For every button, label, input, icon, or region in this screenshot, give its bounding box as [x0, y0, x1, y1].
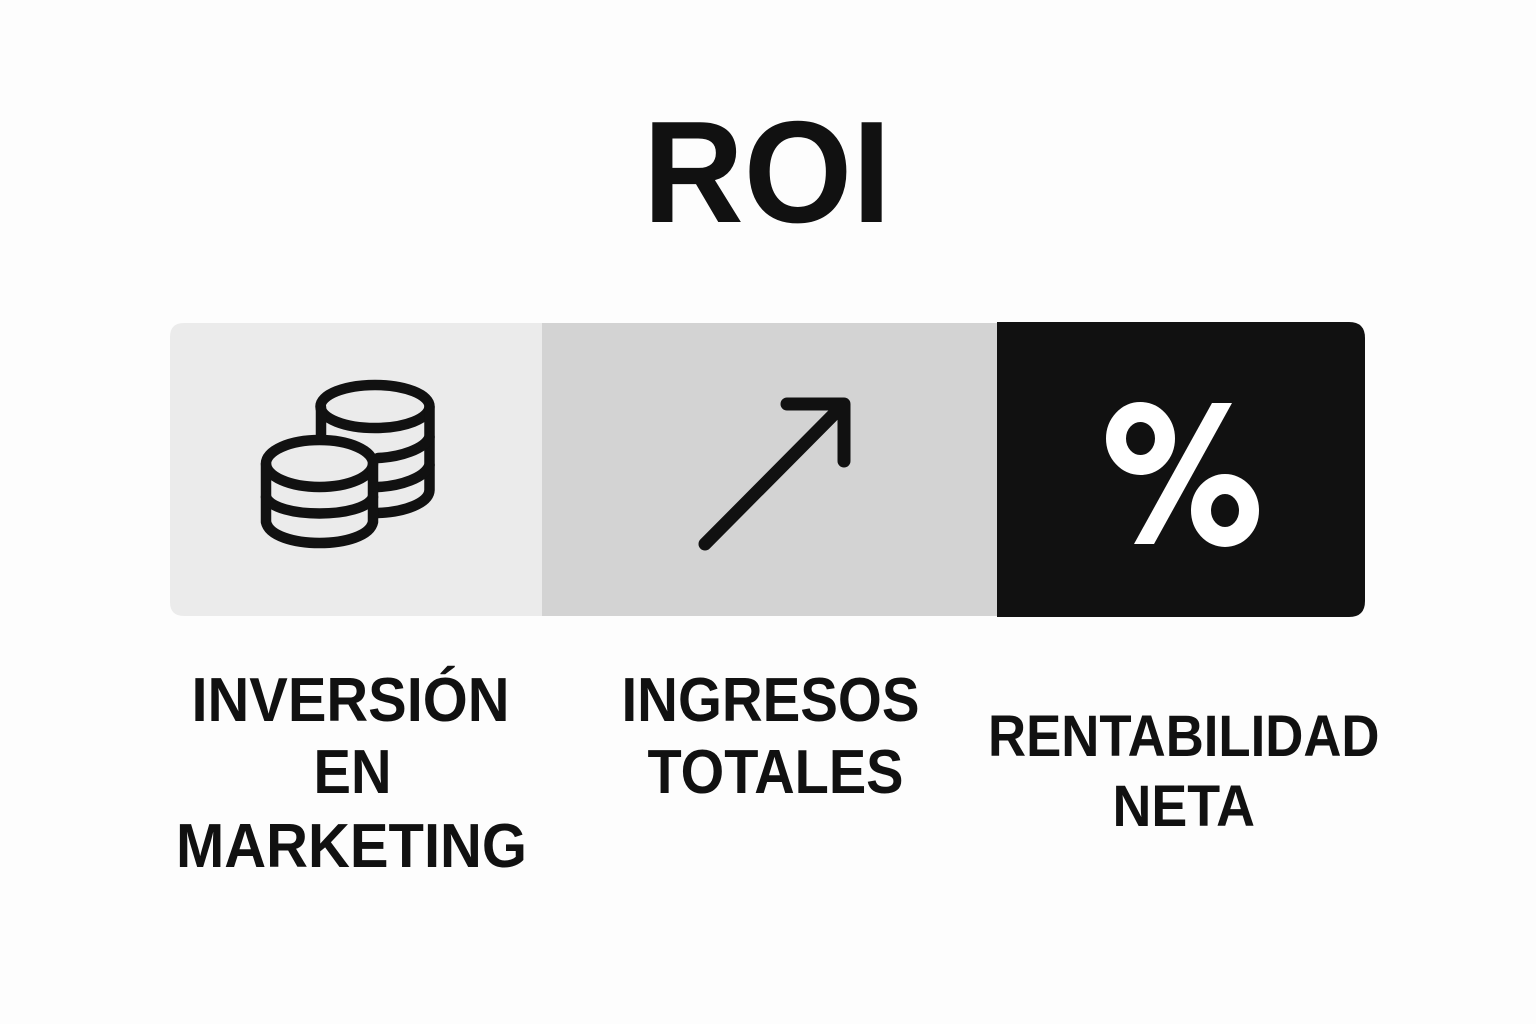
- label: investment: EN: [314, 738, 392, 807]
- label: net return: RENTABILIDAD: [988, 704, 1380, 769]
- icon: coins: [266, 385, 430, 543]
- panel: investment segment: [170, 323, 542, 616]
- label: revenue: INGRESOS: [622, 666, 920, 735]
- label: net return: [988, 704, 1380, 839]
- label: net return: NETA: [1112, 774, 1255, 839]
- icon: percent: [1116, 403, 1249, 544]
- panel: revenue segment: [542, 323, 997, 616]
- bar with three segments: [170, 322, 1365, 617]
- panel: net return segment: [997, 322, 1365, 617]
- label: investment: MARKETING: [176, 812, 527, 881]
- label: revenue: [622, 666, 920, 807]
- label: investment: INVERSIÓN: [192, 666, 510, 735]
- icon: arrow: [705, 404, 844, 544]
- title: ROI: [643, 91, 891, 253]
- label: investment: [176, 666, 527, 881]
- label: revenue: TOTALES: [648, 738, 904, 807]
